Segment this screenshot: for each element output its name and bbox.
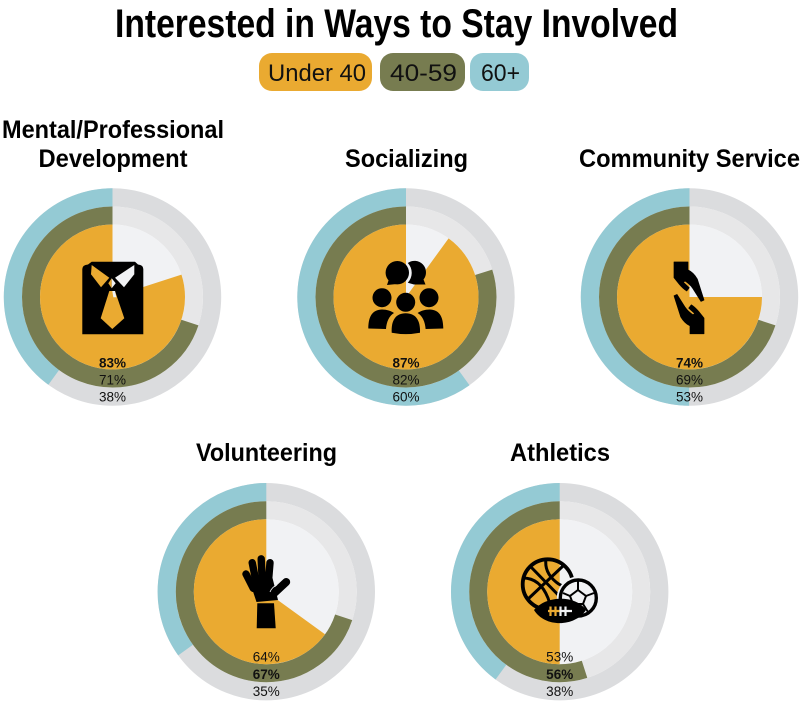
icon: shirt and tie — [82, 262, 143, 334]
icon: helping hands — [674, 262, 704, 334]
radial chart: 69% — [676, 372, 703, 388]
panel: socializing — [306, 145, 506, 404]
heading: Volunteering — [196, 439, 337, 467]
radial chart: 64% — [253, 650, 280, 665]
radial chart — [460, 492, 659, 699]
heading: Development — [38, 145, 188, 173]
radial chart: 82% — [392, 372, 420, 388]
legend: under 40 — [259, 53, 372, 91]
title: Interested in Ways to Stay Involved — [115, 2, 678, 46]
heading: Mental/Professional — [2, 116, 224, 144]
icon: raised hand — [246, 559, 286, 628]
legend: 40-59: 40-59 — [390, 60, 457, 87]
panel: athletics — [460, 439, 659, 699]
radial chart — [306, 197, 506, 404]
radial chart: 83% — [99, 356, 126, 370]
radial chart: 53% — [676, 390, 703, 404]
icon: sports balls — [523, 559, 600, 623]
radial chart: 60% — [392, 390, 420, 404]
legend: 60+ — [470, 53, 529, 91]
radial chart — [167, 492, 366, 699]
panel: community service — [579, 145, 800, 404]
heading: Athletics — [510, 439, 610, 467]
panel: volunteering — [167, 439, 366, 699]
radial chart: 74% — [676, 356, 703, 370]
radial chart: 87% — [392, 356, 420, 370]
radial chart: 67% — [253, 667, 280, 682]
legend — [259, 53, 529, 91]
radial chart: 53% — [546, 650, 573, 665]
panel: mental/professional development — [2, 116, 224, 404]
radial chart: 35% — [253, 684, 280, 699]
radial chart: 38% — [546, 684, 573, 699]
radial chart: 38% — [99, 390, 126, 404]
legend: 60+: 60+ — [481, 60, 520, 87]
legend: 40-59 — [380, 53, 465, 91]
icon: group with speech bubbles — [368, 261, 443, 334]
radial chart — [13, 197, 212, 404]
radial chart — [590, 197, 789, 404]
heading — [2, 116, 224, 173]
heading: Socializing — [345, 145, 468, 173]
legend: under 40: Under 40 — [268, 60, 366, 87]
radial chart: 56% — [546, 667, 573, 682]
radial chart: 71% — [99, 372, 126, 388]
